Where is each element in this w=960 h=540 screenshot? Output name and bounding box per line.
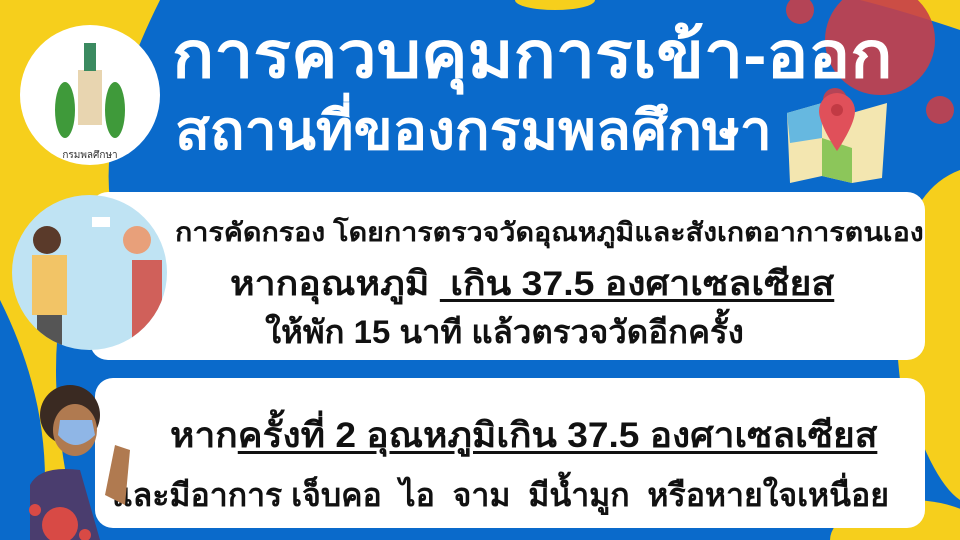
panel: second check	[95, 378, 925, 528]
virus	[786, 0, 954, 124]
title: การควบคุมการเข้า-ออก	[172, 19, 892, 91]
text: rest 15 min: ให้พัก 15 นาที แล้วตรวจวัดอีกครั้ง	[265, 314, 744, 350]
text: symptoms: และมีอาการ เจ็บคอ ไอ จาม มีน้ำมูก หรือหายใจเหนื่อย	[112, 477, 889, 513]
text: สถานที่ของกรมพลศึกษา	[175, 101, 772, 161]
illustration: temperature check	[12, 195, 167, 350]
illustration: coughing person	[29, 385, 130, 540]
text: screening line: การคัดกรอง โดยการตรวจวัดอุณหภูมิและสังเกตอาการตนเอง	[175, 217, 924, 247]
icon: map pin	[787, 93, 887, 183]
text: second time: หากครั้งที่ 2 อุณหภูมิเกิน 37.5 องศาเซลเซียส	[170, 416, 877, 455]
logo	[20, 25, 160, 165]
logo: กรมพลศึกษา	[62, 149, 118, 161]
panel: screening	[90, 192, 925, 360]
text: temperature: หากอุณหภูมิ เกิน 37.5 องศาเซลเซียส	[230, 265, 834, 303]
